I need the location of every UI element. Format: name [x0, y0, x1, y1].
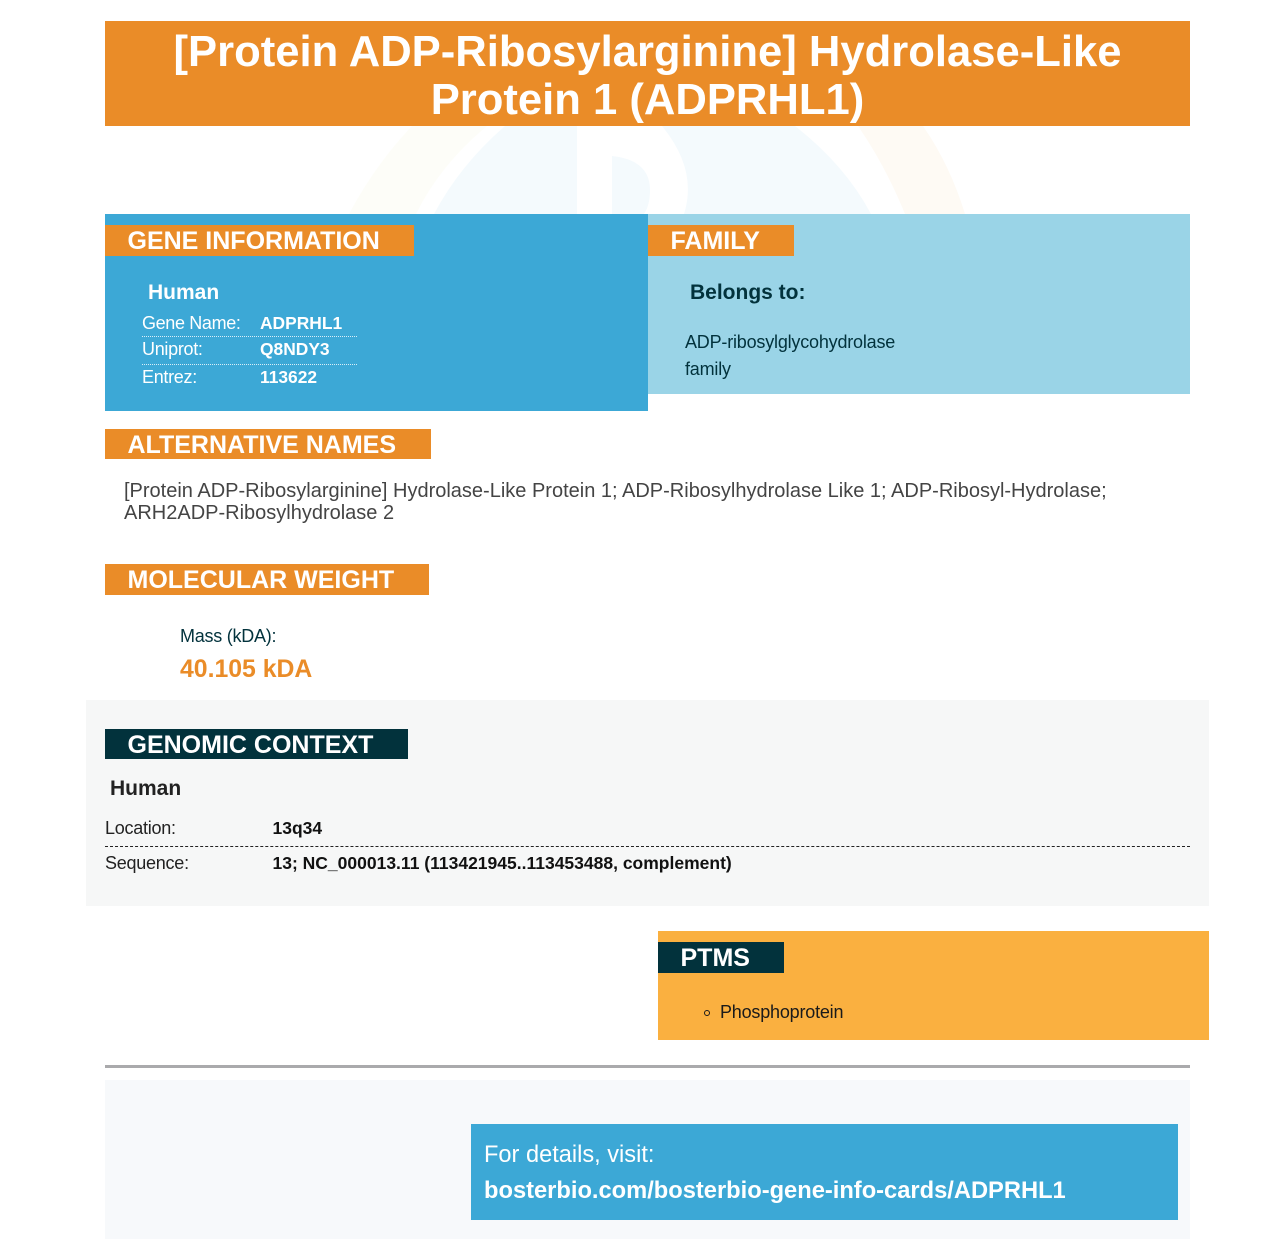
- species label: Human: [148, 281, 219, 304]
- entrez row: Entrez:: [142, 367, 197, 387]
- family name: ADP-ribosylglycohydrolase: [685, 332, 895, 352]
- title banner: [Protein ADP-Ribosylarginine] Hydrolase-Like: [174, 28, 1121, 76]
- panel: gene information: [105, 214, 648, 411]
- heading: genomic context: GENOMIC CONTEXT: [128, 731, 373, 759]
- gene name row: Gene Name:: [142, 313, 241, 333]
- sequence row: 13; NC_000013.11 (113421945..113453488, complement): [272, 853, 732, 873]
- entrez row: 113622: [260, 367, 317, 387]
- heading: gene information: GENE INFORMATION: [128, 227, 380, 255]
- panel: genomic context: [86, 700, 1209, 906]
- heading: alternative names: ALTERNATIVE NAMES: [128, 431, 396, 459]
- heading: ptms: [658, 942, 784, 973]
- sequence row: Sequence:: [105, 853, 189, 873]
- uniprot row: [142, 337, 357, 365]
- belongs to label: Belongs to:: [690, 281, 806, 304]
- title banner: [105, 21, 1190, 126]
- callout: details link: [471, 1124, 1178, 1220]
- list item: Phosphoprotein: [720, 1002, 843, 1022]
- location row: 13q34: [272, 818, 322, 838]
- family name: [685, 332, 895, 379]
- species label: Human: [110, 777, 181, 800]
- heading: family: FAMILY: [670, 227, 760, 255]
- location row: Location:: [105, 818, 176, 838]
- mass label: Mass (kDA):: [180, 626, 276, 646]
- gene name row: [142, 309, 357, 337]
- callout label: For details, visit:: [484, 1142, 654, 1168]
- location row: [105, 811, 1190, 847]
- footer panel: [105, 1080, 1190, 1239]
- uniprot row: Uniprot:: [142, 339, 203, 359]
- list bullet: [704, 1010, 710, 1016]
- panel: ptms: [658, 931, 1209, 1040]
- title banner: Protein 1 (ADPRHL1): [431, 76, 864, 124]
- alternative names text: [124, 480, 1107, 524]
- panel: family: [648, 214, 1190, 394]
- heading: molecular weight: MOLECULAR WEIGHT: [128, 566, 394, 594]
- watermark logo: [434, 126, 965, 214]
- callout url: bosterbio.com/bosterbio-gene-info-cards/ADPRHL1: [484, 1178, 1066, 1204]
- mass value: 40.105 kDA: [180, 656, 312, 683]
- divider: [105, 1065, 1190, 1068]
- family name: family: [685, 359, 731, 379]
- entrez row: [142, 367, 317, 387]
- heading: family: [648, 225, 794, 256]
- gene name row: ADPRHL1: [260, 313, 342, 333]
- heading: ptms: PTMS: [680, 944, 750, 972]
- alternative names text: ARH2ADP-Ribosylhydrolase 2: [124, 502, 394, 524]
- uniprot row: Q8NDY3: [260, 339, 330, 359]
- alternative names text: [Protein ADP-Ribosylarginine] Hydrolase-Like Protein 1; ADP-Ribosylhydrolase Like 1; ADP-Ribosyl-Hydrolase;: [124, 480, 1107, 502]
